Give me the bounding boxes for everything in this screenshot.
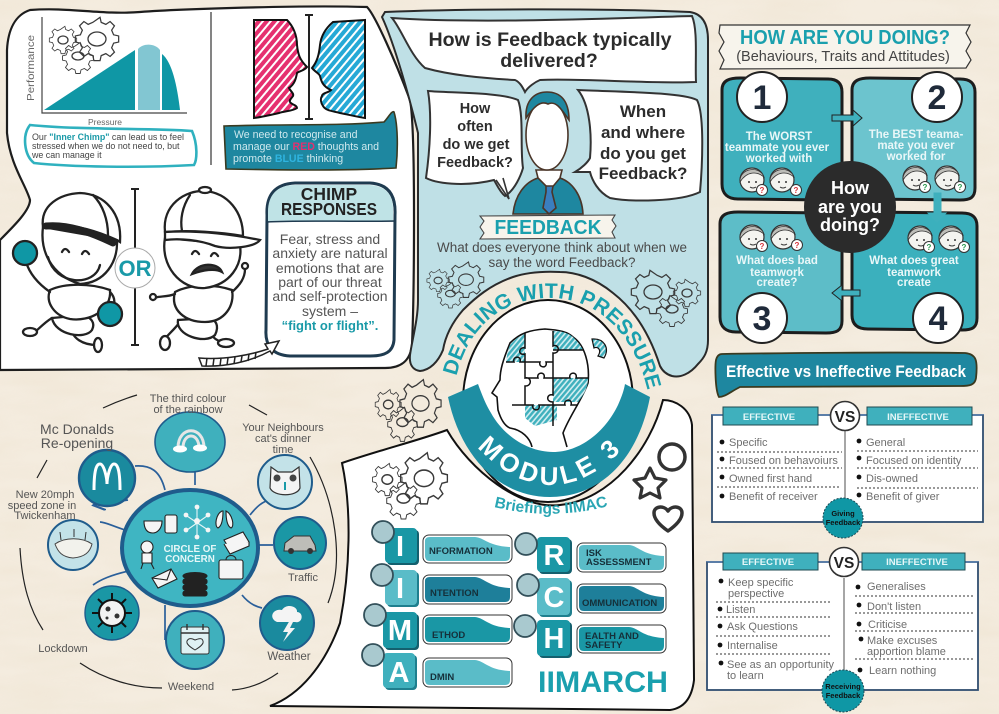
receiving feedback badge: Feedback <box>826 691 861 700</box>
panel: receiving feedback <box>707 548 978 712</box>
receiving feedback badge: Receiving <box>825 682 861 691</box>
quadrant 1 <box>722 78 842 200</box>
chimp responses box: CHIMP <box>301 184 358 204</box>
quadrant 3: teamwork <box>750 267 804 279</box>
icon: star <box>634 468 666 498</box>
inner chimp callout: we can manage it <box>31 150 102 160</box>
ineffective list: Benefit of giver <box>866 491 940 503</box>
effective list: perspective <box>728 588 784 600</box>
main speech bubble: delivered? <box>500 50 598 72</box>
performance chart: Performance <box>25 35 37 101</box>
red blue thinking callout: RED thoughts and <box>292 141 379 153</box>
tile and label: Health and safety: H <box>544 623 564 655</box>
effective list <box>720 437 838 503</box>
chimp flight figure <box>150 187 260 350</box>
main speech bubble: How is Feedback typically <box>428 29 672 51</box>
quadrant 2: mate you ever <box>877 140 955 152</box>
quadrant 1: ? <box>760 186 765 195</box>
ineffective list: Generalises <box>867 581 926 593</box>
satellite labels: The third colour <box>150 393 227 405</box>
ineffective header: INEFFECTIVE <box>886 557 948 568</box>
satellite labels: Re-opening <box>41 435 113 451</box>
chimp responses box: anxiety are natural <box>272 245 388 261</box>
right speech bubble: do you get <box>600 144 686 163</box>
satellite labels: cat's dinner <box>255 433 311 445</box>
effective list: Foused on behavoiurs <box>729 455 838 467</box>
quadrant 3: ? <box>760 242 765 251</box>
effective vs ineffective banner: Effective vs Ineffective Feedback <box>726 363 967 381</box>
effective header: EFFECTIVE <box>743 412 795 423</box>
icon: circle <box>659 444 685 470</box>
quadrant 2: The BEST teama- <box>869 129 963 141</box>
tile and label: Information: I <box>396 531 404 563</box>
rainbow circle <box>155 412 225 472</box>
dealing with pressure arc title: DEALING WITH PRESSURE <box>442 283 662 390</box>
quadrant 4: ? <box>927 243 932 252</box>
McDonalds circle <box>79 450 135 506</box>
concern icons <box>141 505 249 596</box>
puzzle head <box>492 329 606 447</box>
satellite labels: Traffic <box>288 572 318 584</box>
satellite labels: time <box>273 444 293 456</box>
how are you doing banner: (Behaviours, Traits and Attitudes) <box>736 49 950 65</box>
quadrant 1: ? <box>794 186 799 195</box>
quadrant 2 <box>852 78 975 200</box>
virus circle <box>85 586 139 640</box>
effective list: Specific <box>729 437 768 449</box>
chimp responses box: emotions that are <box>276 260 384 276</box>
chimp responses box <box>266 183 395 356</box>
number 4 <box>913 293 963 343</box>
tile and label: Health and safety <box>514 615 666 658</box>
satellite labels: Mc Donalds <box>40 421 114 437</box>
giving feedback badge: Giving <box>831 509 855 518</box>
quadrant 4: teamwork <box>887 267 941 279</box>
panel: giving feedback <box>712 402 983 538</box>
arrow to chimp responses <box>199 341 279 366</box>
red blue thinking callout: We need to recognise and <box>234 129 358 141</box>
car circle <box>274 517 326 569</box>
chimp responses box: part of our threat <box>278 274 382 290</box>
panel: circle of concern <box>8 393 336 693</box>
right speech bubble: Feedback? <box>599 164 687 183</box>
tile and label: Communication <box>517 574 666 617</box>
center badge: are you <box>818 197 882 217</box>
cogs beside module <box>375 380 441 441</box>
satellite labels: speed zone in <box>8 500 76 512</box>
briefings heading: Briefings IIMAC <box>494 496 607 517</box>
effective list: Listen <box>726 604 755 616</box>
OR badge: OR <box>118 256 152 281</box>
vs badge: VS <box>835 409 855 426</box>
feedback banner: FEEDBACK <box>494 217 602 239</box>
ineffective header <box>867 407 972 425</box>
giving feedback badge: Feedback <box>826 518 861 527</box>
ineffective list: Dis-owned <box>866 473 918 485</box>
number 3: 3 <box>753 300 771 338</box>
quadrant 4 <box>852 212 977 330</box>
center badge: How <box>831 178 870 198</box>
vs badge: VS <box>834 555 854 572</box>
central circle of concern: CIRCLE OF <box>164 544 216 555</box>
tile and label: Risk assessment: ISK <box>586 548 602 559</box>
satellite labels: Twickenham <box>14 510 76 522</box>
red blue thinking callout: promote <box>233 153 275 165</box>
right speech bubble: and where <box>601 123 685 142</box>
panel: inner chimp <box>0 6 414 370</box>
ineffective list: apportion blame <box>867 646 946 658</box>
quadrant 2: ? <box>958 183 963 192</box>
how are you doing banner: HOW ARE YOU DOING? <box>740 27 950 49</box>
ineffective list: Focused on identity <box>866 455 962 467</box>
quadrant 3: create? <box>757 277 797 289</box>
number 3 <box>737 293 787 343</box>
ineffective header: INEFFECTIVE <box>887 412 949 423</box>
effective vs ineffective banner <box>715 353 977 397</box>
center badge <box>804 161 896 253</box>
tile and label: Risk assessment: R <box>544 540 565 572</box>
quadrant 2: worked for <box>886 151 946 163</box>
ineffective list: General <box>866 437 905 449</box>
right speech bubble <box>575 90 702 200</box>
chimp fight figure <box>13 193 122 352</box>
left speech bubble: How <box>460 101 491 117</box>
tile and label: Intention <box>371 564 512 607</box>
chimp responses box: RESPONSES <box>281 199 377 219</box>
satellite labels: Weather <box>267 651 311 663</box>
ineffective list: Learn nothing <box>869 665 936 677</box>
IIMARCH title: IIMARCH <box>538 666 668 699</box>
effective list: Owned first hand <box>729 473 812 485</box>
number 1 <box>737 72 787 122</box>
calendar circle <box>166 611 224 669</box>
tile and label: Information <box>372 521 512 565</box>
cogs right <box>631 270 701 327</box>
number 1: 1 <box>753 79 771 117</box>
satellite labels: New 20mph <box>16 489 74 501</box>
effective header <box>723 553 818 570</box>
quadrant 2: ? <box>923 183 928 192</box>
ineffective list: Make excuses <box>867 635 938 647</box>
tile and label: Admin <box>362 644 512 690</box>
tile and label: Intention: I <box>396 573 404 605</box>
outer ring arcs <box>20 395 336 690</box>
satellite labels: of the rainbow <box>153 404 223 416</box>
module dome <box>442 283 662 503</box>
tile and label: Communication: C <box>544 582 565 614</box>
chimp responses box: system – <box>302 303 358 319</box>
quadrant 3: ? <box>795 241 800 250</box>
ineffective list: Criticise <box>868 619 907 631</box>
effective list: See as an opportunity <box>727 659 835 671</box>
tile and label: Risk assessment: ASSESSMENT <box>586 557 652 568</box>
satellite labels: Lockdown <box>38 643 88 655</box>
icon: heart <box>654 507 682 531</box>
performance chart <box>25 17 187 127</box>
chimp responses box: “fight or flight”. <box>282 318 378 333</box>
tile and label: Admin: DMIN <box>430 672 454 683</box>
quadrant 3 <box>720 212 842 333</box>
inner chimp callout: Our <box>32 132 49 142</box>
tile and label: Risk assessment <box>515 533 666 574</box>
tile and label: Method <box>364 604 512 650</box>
satellite labels <box>8 393 324 693</box>
stadium circle <box>48 520 98 570</box>
effective list <box>718 577 835 682</box>
left speech bubble <box>426 91 523 199</box>
tile and label: Information: NFORMATION <box>429 546 493 557</box>
central circle of concern <box>122 490 258 606</box>
quadrant 1: teammate you ever <box>725 142 830 154</box>
how are you doing banner <box>719 25 971 69</box>
panel: feedback <box>382 9 708 376</box>
tile and label: Communication: OMMUNICATION <box>582 598 657 609</box>
satellite labels: Weekend <box>168 681 214 693</box>
arrow 2 to 4 <box>928 193 946 222</box>
ineffective header <box>862 553 965 570</box>
chimp responses box: and self-protection <box>272 288 388 304</box>
module 3 ribbon: MODULE 3 <box>478 436 618 486</box>
vs badge <box>830 548 858 576</box>
effective header <box>723 407 818 425</box>
quadrant 4: create <box>897 277 931 289</box>
satellite labels: Your Neighbours <box>242 422 324 434</box>
effective header: EFFECTIVE <box>742 557 794 568</box>
effective list: Keep specific <box>728 577 794 589</box>
tile and label: Health and safety: SAFETY <box>585 640 623 651</box>
number 4: 4 <box>929 300 948 338</box>
center badge: doing? <box>820 215 880 235</box>
red and blue faces <box>254 14 365 120</box>
receiving feedback badge <box>822 670 864 712</box>
OR badge <box>115 248 155 288</box>
left speech bubble: do we get <box>443 137 510 153</box>
red blue thinking callout: manage our <box>233 141 292 153</box>
effective list: to learn <box>727 670 764 682</box>
feedback person <box>513 92 583 214</box>
performance chart: Pressure <box>88 117 122 127</box>
quadrant 1: The WORST <box>746 131 812 143</box>
panel: how are you doing <box>719 25 977 343</box>
number 2: 2 <box>928 79 946 117</box>
inner chimp callout <box>25 125 196 167</box>
left speech bubble: Feedback? <box>437 155 513 171</box>
effective list: Benefit of receiver <box>729 491 818 503</box>
quadrant 4: ? <box>962 243 967 252</box>
divider bar <box>131 188 139 346</box>
cat circle <box>258 455 312 509</box>
connecting arrows <box>93 466 273 640</box>
quadrant 4: What does great <box>869 255 959 267</box>
cogs in panel <box>373 453 447 519</box>
feedback question: say the word Feedback? <box>488 255 636 270</box>
tile and label: Method: M <box>388 615 412 647</box>
tile and label: Method: ETHOD <box>432 630 465 641</box>
main speech bubble <box>392 16 696 92</box>
inner chimp callout: stressed when we do not need to, but <box>32 141 180 151</box>
weather circle <box>260 596 314 650</box>
ineffective list <box>856 581 946 677</box>
tile and label: Health and safety: EALTH AND <box>585 631 639 642</box>
red blue thinking callout: BLUE thinking <box>275 153 343 165</box>
tile and label: Admin: A <box>389 657 410 689</box>
arrow 1 to 2 <box>832 110 862 126</box>
effective list: Ask Questions <box>727 621 798 633</box>
tile and label: Intention: NTENTION <box>430 588 479 599</box>
giving feedback badge <box>823 498 863 538</box>
effective list: Internalise <box>727 640 778 652</box>
red blue thinking callout <box>224 112 397 170</box>
panel: IIMARCH <box>270 399 695 711</box>
left speech bubble: often <box>457 119 493 135</box>
chimp responses box: Fear, stress and <box>280 231 380 247</box>
feedback question: What does everyone think about when we <box>437 240 687 255</box>
number 2 <box>912 72 962 122</box>
quadrant 1: worked with <box>745 153 812 165</box>
inner chimp callout: "Inner Chimp" can lead us to feel <box>49 132 184 142</box>
ineffective list: Don't listen <box>867 601 921 613</box>
right speech bubble: When <box>620 102 666 121</box>
module 3 ribbon <box>448 384 650 497</box>
ineffective list <box>857 437 962 503</box>
quadrant 3: What does bad <box>736 255 818 267</box>
central circle of concern: CONCERN <box>165 554 215 565</box>
vs badge <box>830 402 860 430</box>
cogs left <box>427 262 484 308</box>
arrow 4 to 3 <box>832 285 860 301</box>
